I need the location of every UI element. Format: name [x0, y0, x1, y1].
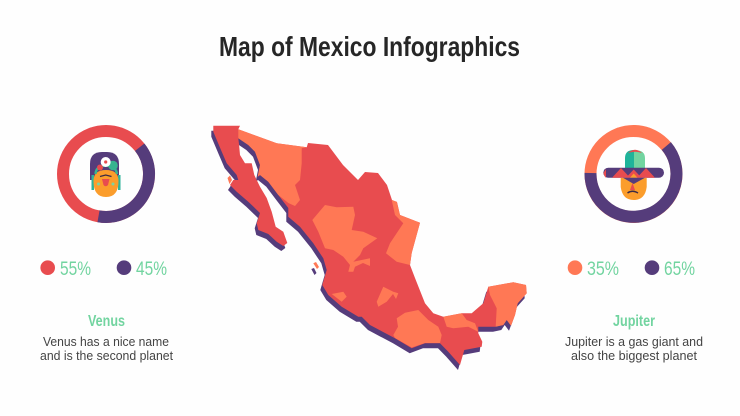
state: Veracruz north [386, 200, 420, 265]
state: Colima [332, 292, 347, 302]
legend: Jupiter 35%: 35% [587, 259, 619, 280]
icon: man with sombrero [603, 150, 664, 200]
state: Oaxaca [393, 310, 442, 348]
title: Map of Mexico Infographics [219, 31, 520, 62]
map base: red states [213, 126, 527, 365]
legend: Venus 55% [40, 259, 91, 280]
text block: Venus description: Venus has a nice name [43, 334, 169, 349]
legend: Jupiter 35% [568, 259, 619, 280]
state: Morelos [377, 287, 398, 307]
state: central region [312, 205, 377, 272]
legend: Venus 45% [117, 259, 167, 280]
panel: Jupiter [565, 131, 703, 363]
panel: Venus [40, 131, 173, 363]
text block: Venus description [40, 334, 173, 363]
legend: Jupiter 65%: 65% [664, 259, 695, 280]
state: Yucatan [488, 282, 527, 327]
text block: Venus description: and is the second planet [40, 348, 173, 363]
legend: Venus 45%: 45% [136, 259, 167, 280]
legend: Jupiter 65% [645, 259, 695, 280]
heading: Jupiter: Jupiter [613, 313, 655, 330]
state: Tabasco [443, 313, 478, 332]
island [313, 262, 319, 269]
islet [228, 176, 232, 184]
map of Mexico [211, 126, 527, 370]
donut chart: Jupiter [590, 131, 676, 217]
text block: Jupiter description [565, 334, 703, 363]
heading: Venus: Venus [88, 313, 125, 330]
donut chart: Venus [63, 131, 149, 217]
state: Sonora [238, 129, 307, 206]
legend: Venus 55%: 55% [60, 259, 91, 280]
icon: woman with flowers [90, 152, 120, 197]
map shadow [211, 131, 525, 370]
map: orange states [228, 129, 527, 348]
text block: Jupiter description: also the biggest planet [571, 348, 697, 363]
text block: Jupiter description: Jupiter is a gas giant and [565, 334, 703, 349]
